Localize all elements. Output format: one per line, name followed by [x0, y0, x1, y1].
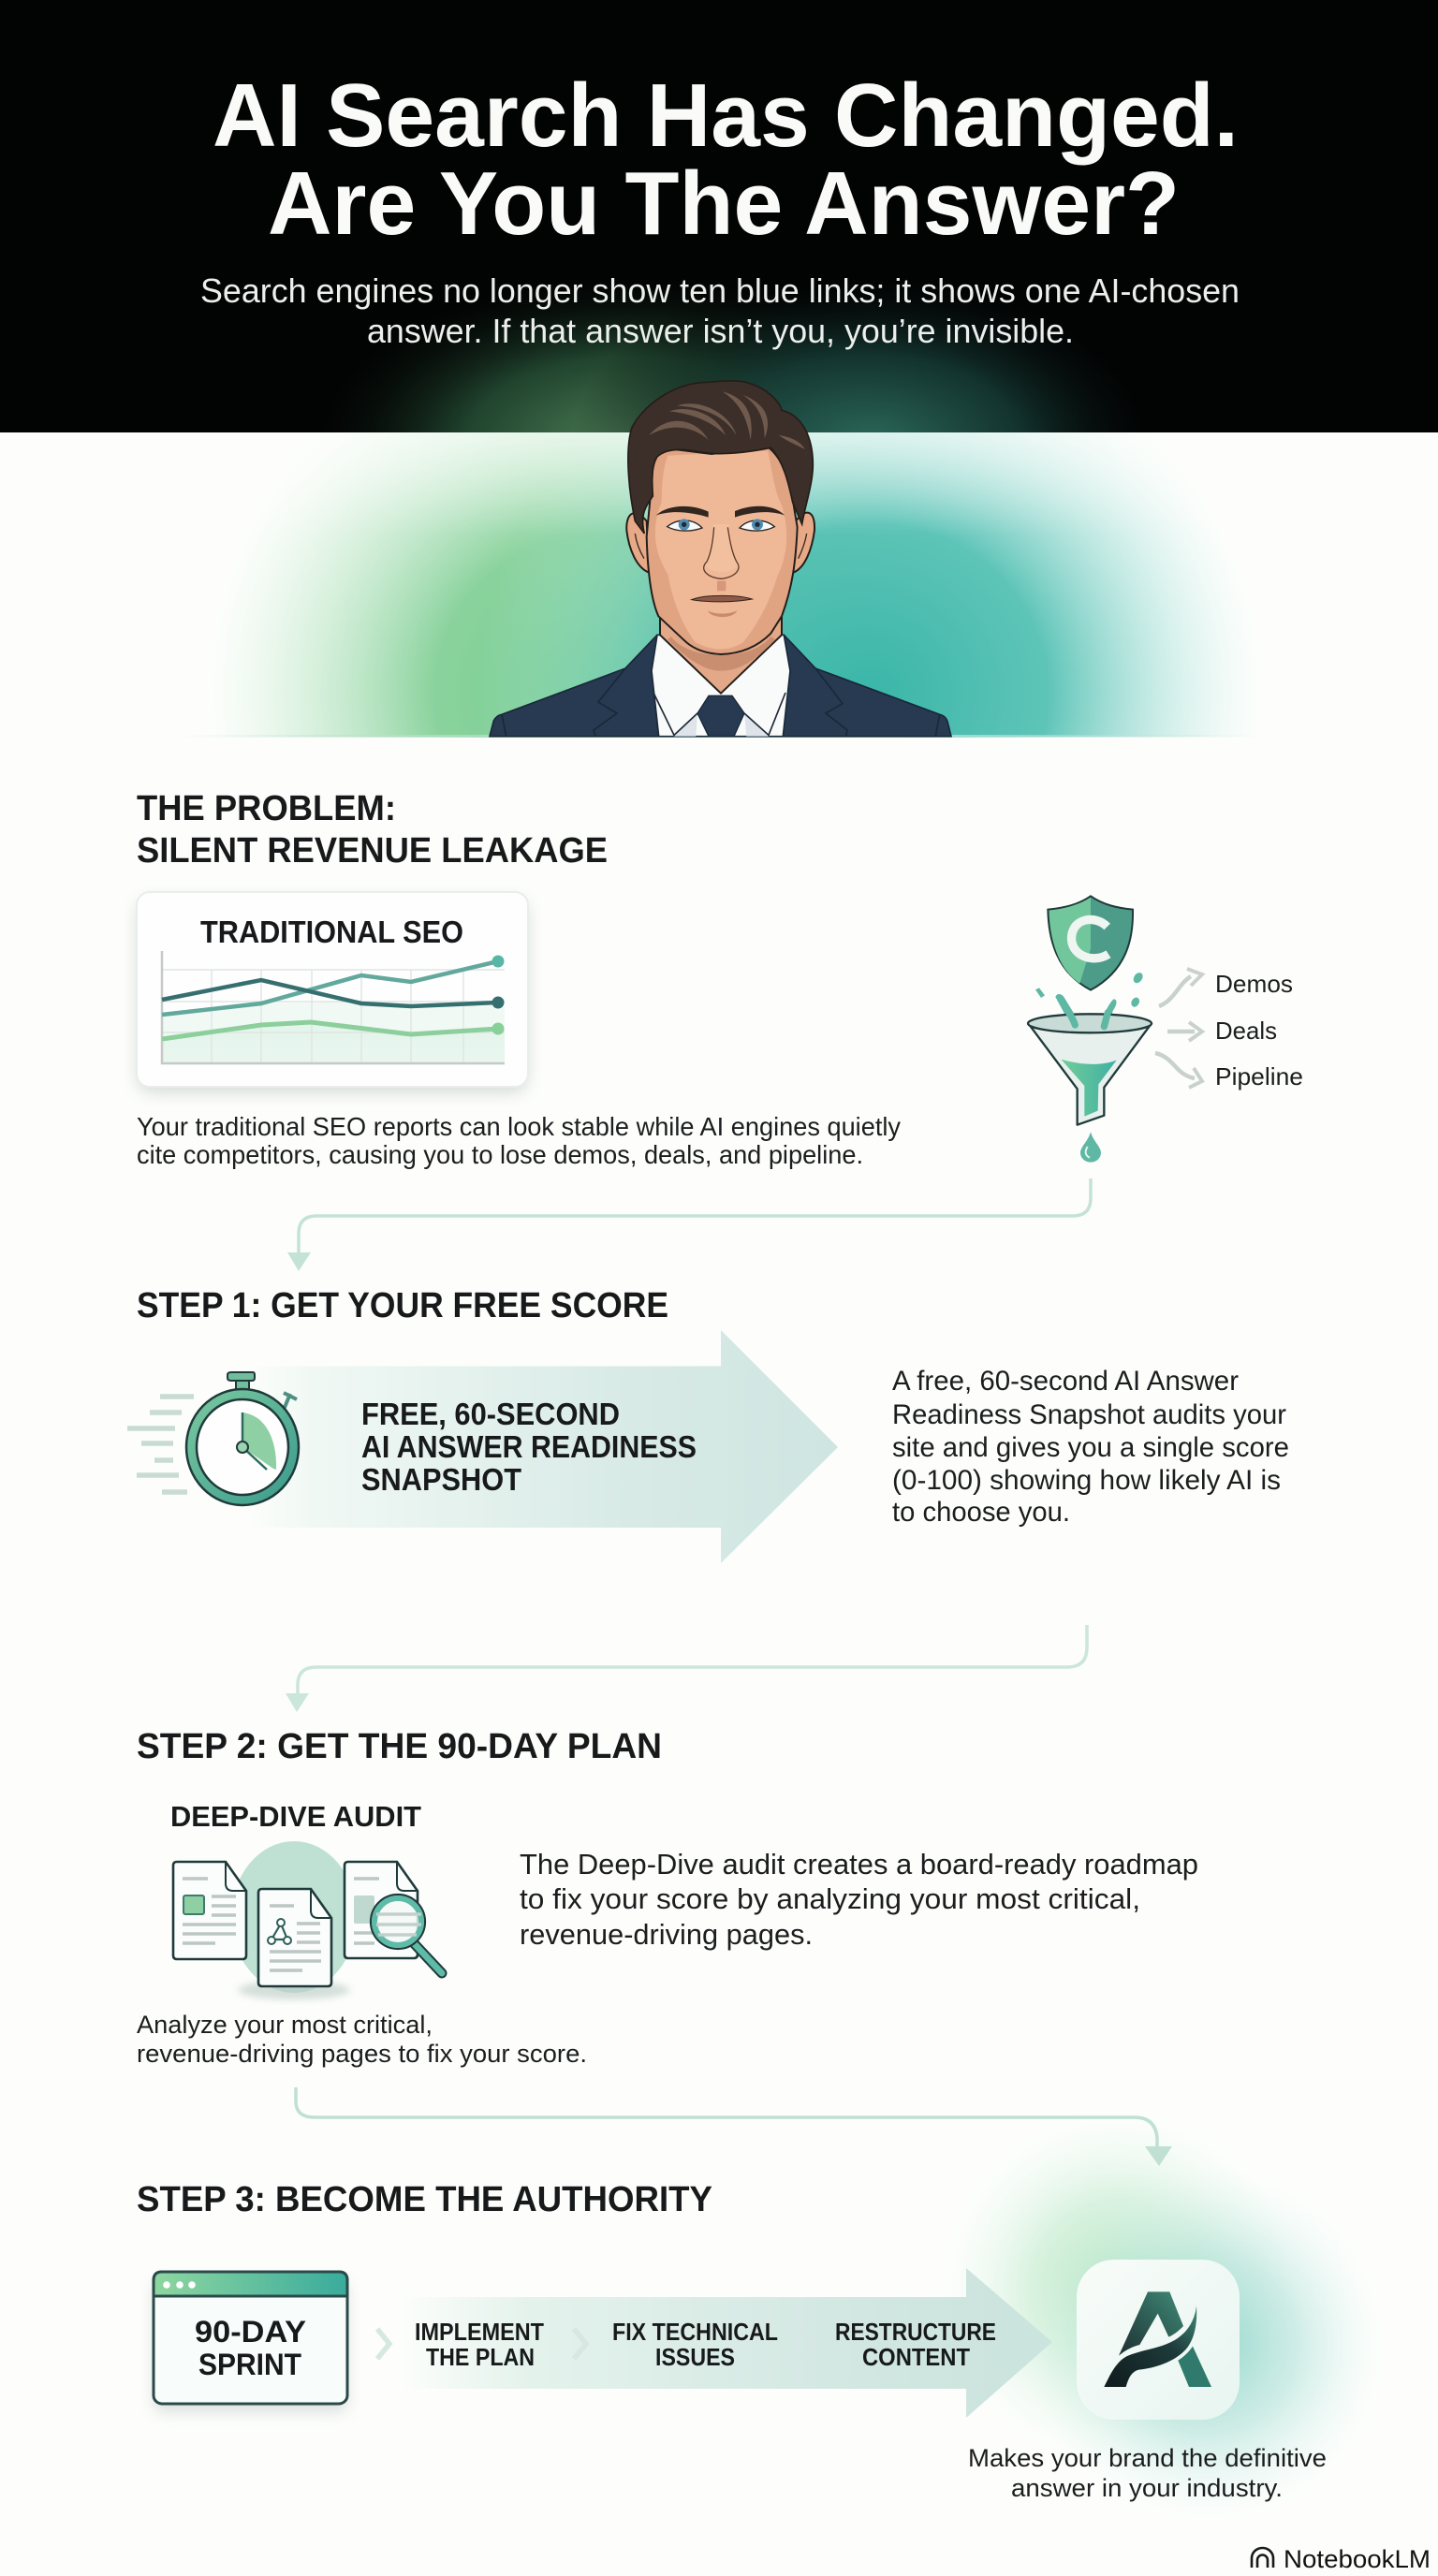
- text: arrow label: SNAPSHOT: [361, 1462, 521, 1497]
- subtitle: [200, 271, 1240, 350]
- letter A: [1104, 2291, 1211, 2387]
- chevrons: [377, 2329, 814, 2359]
- text: sprint actions: FIX TECHNICAL: [612, 2318, 778, 2346]
- shirt: [652, 635, 790, 737]
- glow: authority logo: [941, 2111, 1386, 2523]
- text: sprint actions: RESTRUCTURE: [835, 2318, 996, 2346]
- ears: [626, 513, 649, 573]
- sprint label: SPRINT: [198, 2348, 301, 2381]
- text: analyze caption: [137, 2011, 587, 2068]
- heading: the problem: SILENT REVENUE LEAKAGE: [137, 831, 608, 871]
- text: step 1 description: Readiness Snapshot audits your: [892, 1399, 1286, 1430]
- heading: step 2: STEP 2: GET THE 90-DAY PLAN: [137, 1727, 662, 1766]
- brand: NotebookLM: NotebookLM: [1284, 2545, 1431, 2573]
- text: sprint actions: [415, 2318, 996, 2371]
- sprint label: 90-DAY: [195, 2315, 306, 2349]
- document left: [173, 1862, 246, 1959]
- liquid: [1061, 1060, 1117, 1117]
- text: authority caption: Makes your brand the definitive: [968, 2444, 1327, 2472]
- magnifier: [371, 1895, 442, 1973]
- text: sprint actions: IMPLEMENT: [415, 2318, 544, 2346]
- subtitle: answer. If that answer isn’t you, you’re invisible.: [367, 312, 1074, 350]
- big arrow: snapshot: [243, 1330, 838, 1563]
- sprint label: [195, 2315, 306, 2381]
- neck: [660, 618, 782, 694]
- text: sprint actions: CONTENT: [862, 2343, 970, 2371]
- suit: [490, 635, 951, 737]
- document center: [258, 1889, 331, 1986]
- text: analyze caption: Analyze your most critical,: [137, 2011, 433, 2039]
- icon: audit documents with magnifier: [173, 1841, 442, 1999]
- text: deep-dive description: revenue-driving pages.: [520, 1918, 813, 1951]
- card title: TRADITIONAL SEO: [200, 915, 463, 949]
- icon: stopwatch: [127, 1372, 299, 1505]
- nose: [704, 527, 739, 578]
- title: [213, 66, 1239, 254]
- text: problem description: [137, 1112, 901, 1169]
- heading: step 1: STEP 1: GET YOUR FREE SCORE: [137, 1286, 668, 1325]
- face: [647, 446, 798, 654]
- panel: portrait glow: [237, 432, 1238, 737]
- labels: demos, deals, pipeline: Demos: [1215, 970, 1293, 998]
- icon: authority logo tile: [1077, 2260, 1240, 2420]
- text: authority caption: answer in your industry.: [1011, 2474, 1283, 2502]
- text: problem description: Your traditional SEO reports can look stable while AI engines quietly: [137, 1112, 901, 1141]
- hair: [628, 381, 813, 534]
- text: step 1 description: [892, 1366, 1289, 1528]
- text: deep-dive description: [520, 1848, 1198, 1951]
- icon: shield and leaking funnel: [1028, 896, 1152, 1163]
- arrow: problem to step 1: [287, 1178, 1091, 1271]
- text: step 1 description: (0-100) showing how likely AI is: [892, 1465, 1281, 1496]
- title: Are You The Answer?: [268, 154, 1180, 254]
- labels: demos, deals, pipeline: Pipeline: [1215, 1062, 1303, 1090]
- line chart: [162, 951, 505, 1063]
- rim: [1028, 1014, 1152, 1032]
- illustration: man in suit: [490, 381, 951, 737]
- text: problem description: cite competitors, causing you to lose demos, deals, and pipeline.: [137, 1140, 863, 1169]
- text: analyze caption: revenue-driving pages to fix your score.: [137, 2040, 587, 2068]
- collar lines: [653, 693, 785, 735]
- text: arrow label: AI ANSWER READINESS: [361, 1429, 697, 1464]
- arrow: step 2 to step 3: [296, 2087, 1172, 2166]
- arrow: step 1 to step 2: [286, 1625, 1087, 1712]
- text: arrow label: [361, 1397, 697, 1497]
- heading: the problem: THE PROBLEM:: [137, 789, 396, 828]
- droplets: [1035, 971, 1145, 1051]
- lapels: [502, 668, 940, 737]
- eyebrows: [656, 506, 709, 518]
- tie: [697, 695, 744, 737]
- document right: [345, 1862, 418, 1958]
- text: step 1 description: site and gives you a single score: [892, 1432, 1289, 1463]
- text: step 1 description: to choose you.: [892, 1497, 1070, 1528]
- labels: demos, deals, pipeline: Deals: [1215, 1017, 1277, 1045]
- arrows: funnel outputs: [1155, 969, 1202, 1088]
- text: arrow label: FREE, 60-SECOND: [361, 1397, 620, 1431]
- text: step 1 description: A free, 60-second AI Answer: [892, 1366, 1239, 1397]
- text: sprint actions: THE PLAN: [426, 2343, 535, 2371]
- heading: the problem: [137, 789, 608, 871]
- text: authority caption: [968, 2444, 1327, 2502]
- panel: traditional SEO chart card: [137, 892, 528, 1093]
- panel: 90-day sprint window: [154, 2272, 347, 2412]
- heading: step 3: STEP 3: BECOME THE AUTHORITY: [137, 2180, 712, 2219]
- eyes: [668, 520, 702, 531]
- title: AI Search Has Changed.: [213, 66, 1239, 166]
- labels: demos, deals, pipeline: [1215, 970, 1303, 1090]
- panel: black header: [0, 0, 1438, 432]
- hair highlights: [649, 391, 805, 449]
- text: deep-dive description: to fix your score by analyzing your most critical,: [520, 1882, 1140, 1915]
- big arrow: sprint steps: [398, 2268, 1052, 2418]
- mouth: [692, 595, 752, 602]
- funnel body: [1028, 1023, 1152, 1125]
- text: deep-dive description: The Deep-Dive audit creates a board-ready roadmap: [520, 1848, 1198, 1881]
- text: sprint actions: ISSUES: [655, 2343, 735, 2371]
- heading: deep-dive audit: DEEP-DIVE AUDIT: [170, 1800, 421, 1833]
- shield: [1048, 896, 1133, 990]
- falling drop: [1080, 1132, 1101, 1163]
- subtitle: Search engines no longer show ten blue links; it shows one AI-chosen: [200, 271, 1240, 310]
- speed lines: [127, 1397, 194, 1492]
